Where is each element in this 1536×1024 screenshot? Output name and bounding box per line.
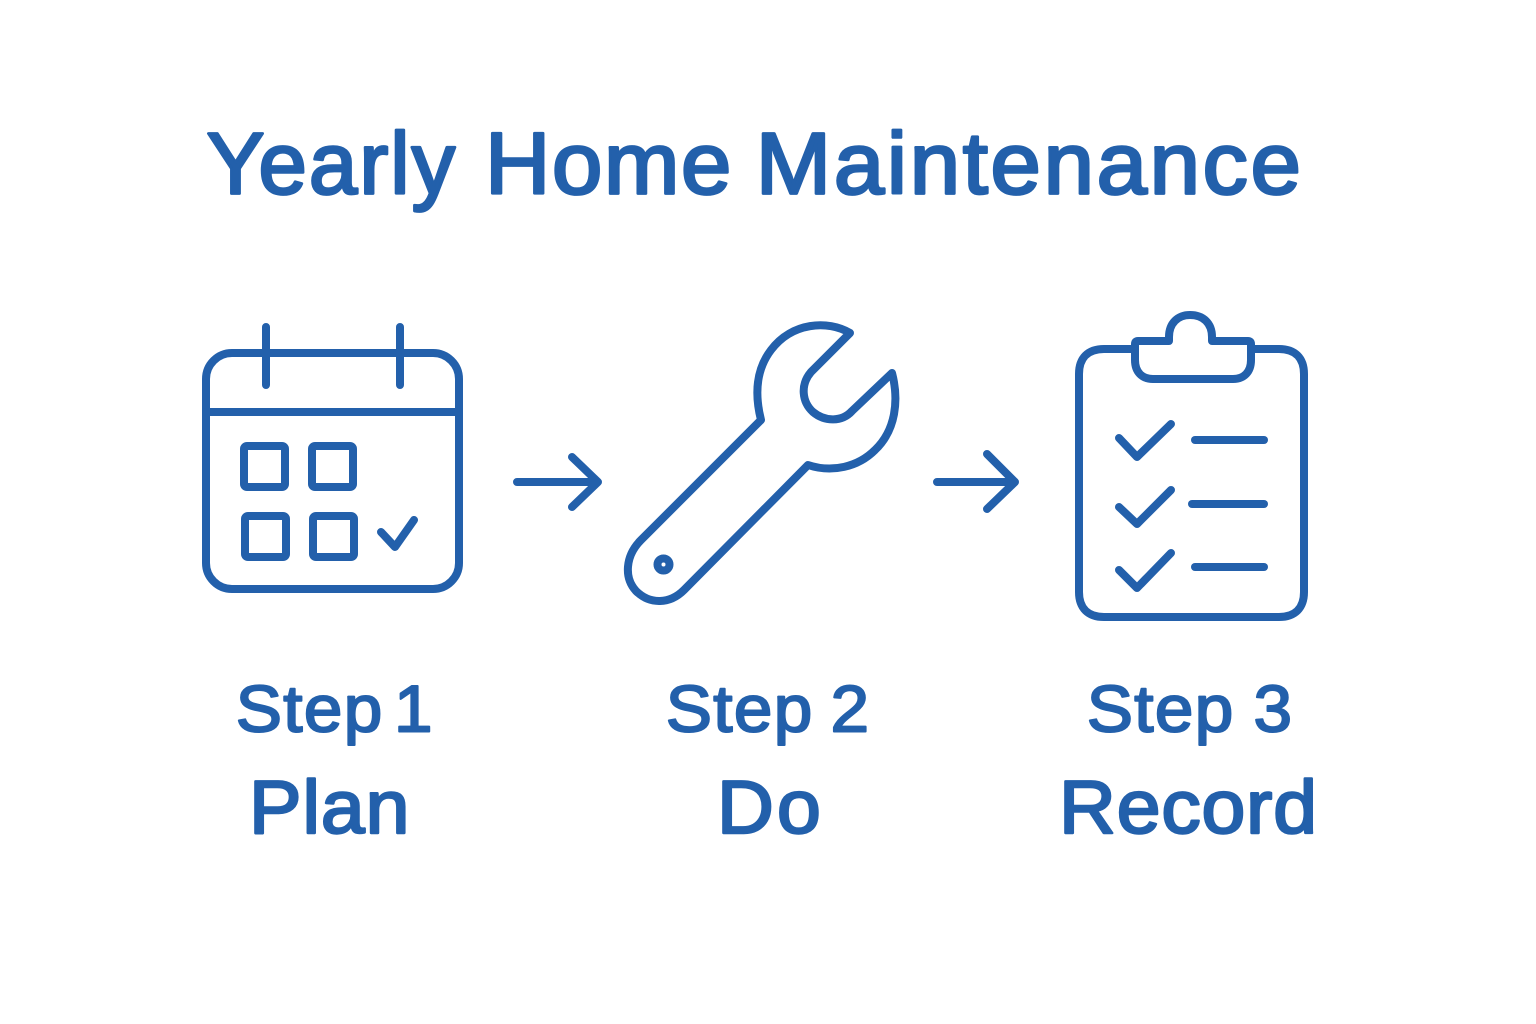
- label: step 3: Step: [1087, 673, 1235, 746]
- label: step 2: 2: [830, 673, 869, 746]
- label: record: Record: [1059, 766, 1318, 850]
- label: step 1: 1: [394, 673, 433, 746]
- title: Maintenance: [756, 115, 1304, 212]
- title: Yearly: [206, 116, 457, 212]
- label: step 3: 3: [1254, 673, 1292, 746]
- title: Home: [485, 115, 733, 212]
- label: step 1: Step: [236, 673, 384, 746]
- icon: calendar: [206, 327, 459, 589]
- arrow: do to record: [937, 454, 1015, 509]
- label: step 2: Step: [666, 673, 814, 746]
- label: plan: Plan: [249, 766, 410, 850]
- label: do: Do: [717, 766, 824, 850]
- title: [206, 115, 1304, 212]
- icon: clipboard checklist: [1079, 315, 1304, 617]
- icon: wrench: [628, 325, 895, 601]
- arrow: plan to do: [517, 457, 598, 507]
